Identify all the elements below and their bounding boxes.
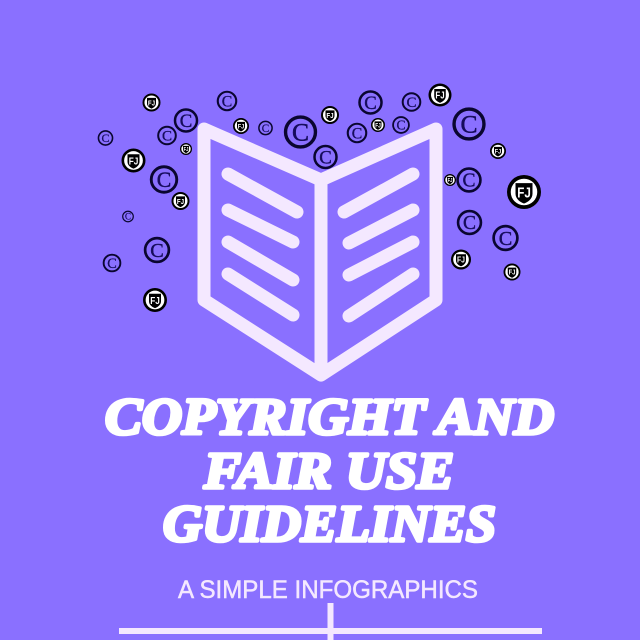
- title: GUIDELINES: [163, 496, 496, 553]
- title: [105, 389, 554, 553]
- icon: open book: [204, 129, 436, 375]
- copyright icons: [98, 92, 517, 272]
- title: FAIR USE: [203, 443, 454, 500]
- divider lines: [119, 603, 542, 640]
- subtitle: A SIMPLE INFOGRAPHICS: [178, 576, 478, 604]
- fair use icons: [122, 84, 541, 312]
- title: COPYRIGHT AND: [105, 389, 554, 446]
